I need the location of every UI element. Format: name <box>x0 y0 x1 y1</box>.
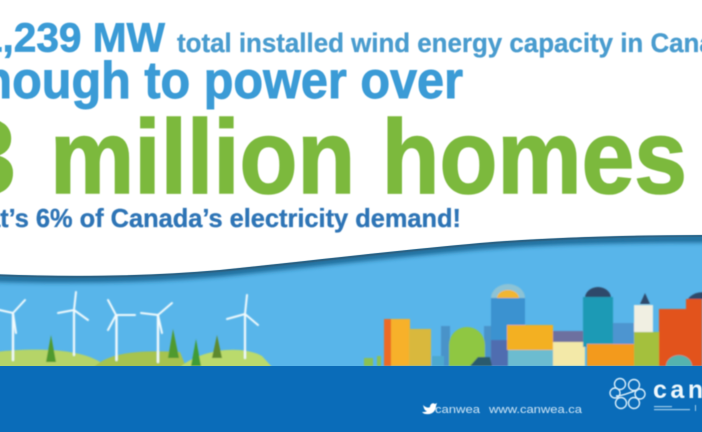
headline text <box>0 14 702 233</box>
white wave <box>0 0 702 276</box>
turbine 4 <box>141 303 172 362</box>
hill 2 <box>94 351 186 367</box>
sky panel <box>0 230 702 370</box>
white clock tower <box>634 293 659 366</box>
wind turbines <box>0 292 258 362</box>
yellow apartment block <box>384 319 431 366</box>
small shrubs <box>364 356 381 366</box>
icon: logo flower <box>610 378 645 408</box>
trees <box>46 329 222 366</box>
icon: twitter bird <box>422 403 437 414</box>
hill 1 <box>0 350 106 367</box>
red building <box>659 292 702 366</box>
footer contact <box>422 403 583 416</box>
website: www.canwea.ca <box>488 404 583 416</box>
blue rear building <box>613 323 635 345</box>
low dark roof <box>470 357 492 366</box>
turbine 2 <box>58 292 88 355</box>
wave shadow <box>0 239 702 279</box>
teal domed tower <box>583 287 613 347</box>
turbine 5 <box>227 295 258 358</box>
wind farm landscape <box>0 292 272 367</box>
CanWEA logo <box>610 376 702 411</box>
logo tagline <box>654 405 696 411</box>
turbine 3 <box>108 300 135 360</box>
yellow wide building <box>507 325 553 366</box>
purple roof building <box>553 331 586 366</box>
wave edge line <box>0 236 702 277</box>
hill 3 <box>180 350 272 367</box>
green tree <box>449 327 485 366</box>
thin blue towers <box>432 326 492 366</box>
blue domed tower <box>491 284 525 366</box>
footer bar <box>0 366 702 432</box>
city skyline <box>364 284 702 366</box>
turbine 1 <box>0 300 25 360</box>
twitter handle: canwea <box>435 404 481 416</box>
orange low building <box>587 344 635 366</box>
